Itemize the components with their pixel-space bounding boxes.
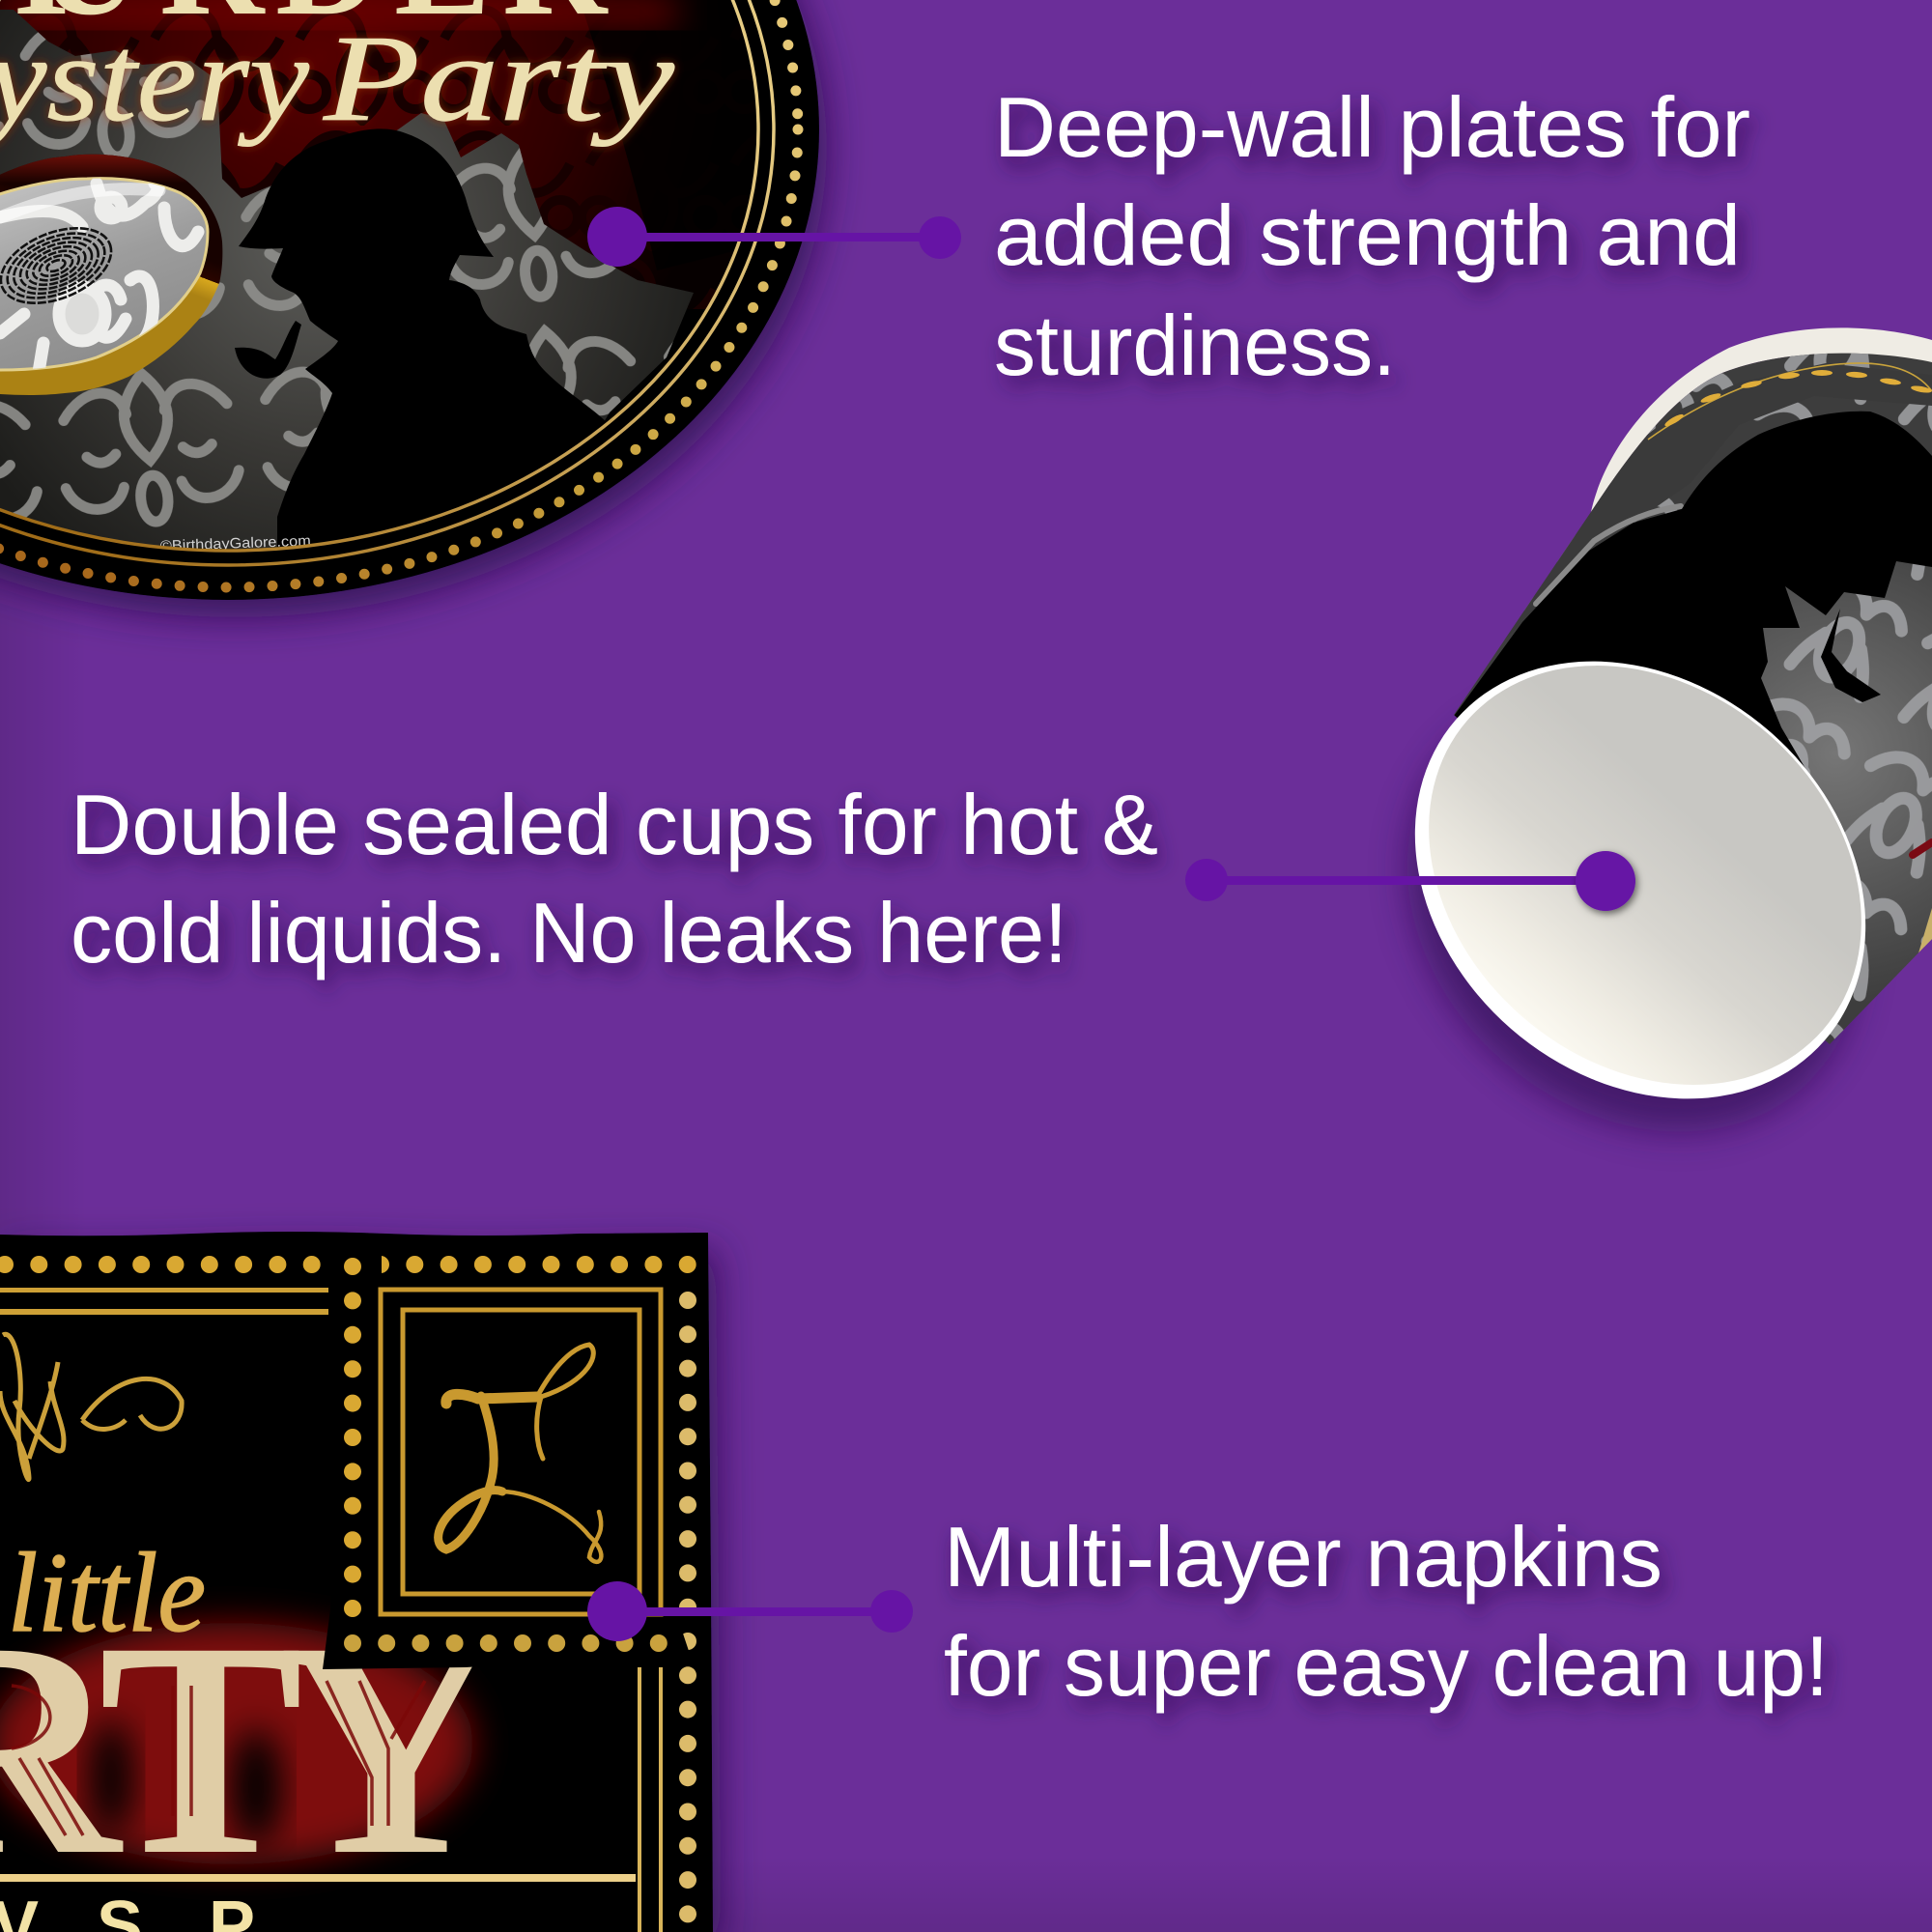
cup caption: cold liquids. No leaks here!: [71, 885, 1067, 980]
silhouette on cup: [1455, 412, 1932, 769]
gold dots top row and right column: [5, 1264, 696, 1932]
cup rim: [1591, 327, 1932, 512]
plate caption: added strength and: [994, 187, 1741, 283]
copyright line: ©BirthdayGalore.com: [160, 533, 311, 554]
fingerprint: [0, 213, 122, 318]
cup callout connector: [1185, 851, 1635, 911]
plate body: [0, 0, 819, 600]
pipe: [235, 321, 301, 379]
magnifying glass: [0, 155, 222, 395]
fold dots column: [344, 1266, 361, 1608]
cup base: [1326, 571, 1932, 1189]
cup caption: [71, 777, 1158, 980]
cup: [1392, 327, 1932, 1147]
napkin callout connector: [587, 1581, 913, 1641]
script word: little: [8, 1529, 206, 1656]
lower gold frame lines: [0, 1667, 663, 1932]
plate headline: [0, 0, 674, 147]
left frame lines: [0, 1288, 328, 1315]
plate headline: Party: [323, 10, 674, 147]
gold square frames: [381, 1290, 661, 1614]
napkin caption: [944, 1509, 1829, 1714]
plate callout connector: [587, 207, 961, 267]
cup shadow: [1319, 604, 1932, 1222]
folded layer: [323, 1236, 690, 1669]
fold dots row: [353, 1634, 671, 1652]
napkin caption: Multi-layer napkins: [944, 1509, 1662, 1605]
cup body: [1454, 354, 1932, 1044]
plate caption: [994, 79, 1750, 393]
plate: [0, 0, 819, 600]
napkin: [0, 1232, 713, 1932]
gold flourish monogram: [439, 1345, 601, 1562]
folded corner: [323, 1236, 690, 1669]
party letter inlines: [12, 1681, 425, 1835]
detective silhouette: [235, 128, 638, 551]
gold border on cup: [1648, 363, 1932, 440]
left flourish: [0, 1334, 182, 1480]
napkin sheet: [0, 1232, 713, 1932]
napkin caption: for super easy clean up!: [944, 1618, 1829, 1714]
red damask area: [0, 0, 773, 309]
plate caption: sturdiness.: [994, 298, 1396, 393]
red glow behind party text: [0, 1623, 473, 1864]
gold double ring: [0, 0, 774, 565]
plate caption: Deep-wall plates for: [994, 79, 1750, 175]
plate printed artwork: [0, 0, 773, 554]
cup caption: Double sealed cups for hot &: [71, 777, 1158, 872]
dotted gold border: [0, 0, 798, 587]
grey damask area: [0, 10, 694, 551]
